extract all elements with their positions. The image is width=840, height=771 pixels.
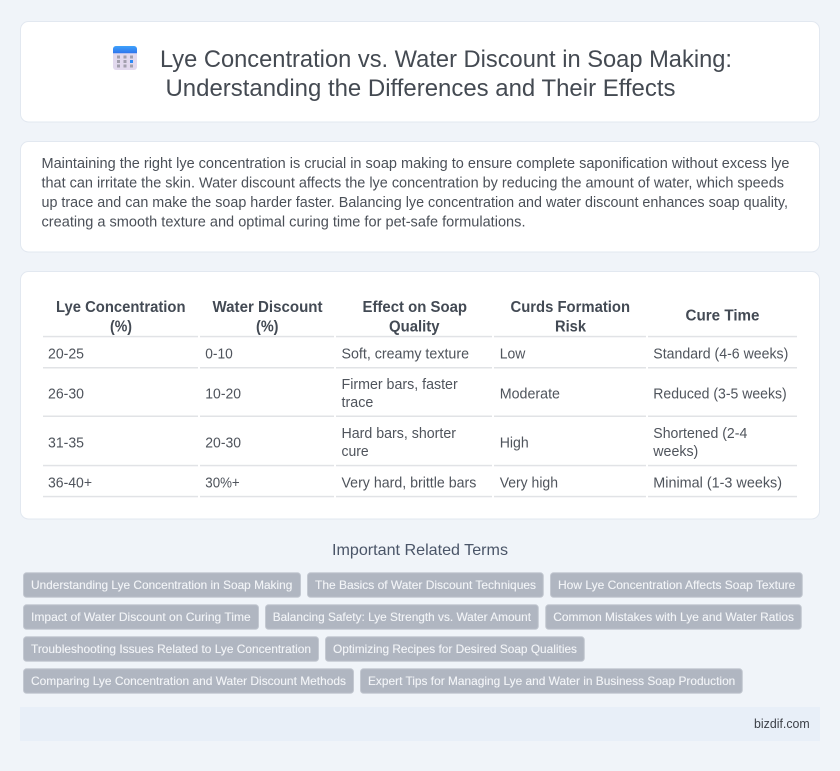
table row 4 xyxy=(48,475,782,491)
table row 3: High xyxy=(500,435,529,451)
table header row: Curds Formation xyxy=(510,299,630,316)
tag: understanding lye concentration: Understanding Lye Concentration in Soap Making xyxy=(31,578,292,592)
table header row: Cure Time xyxy=(686,308,760,325)
heading: related terms: Important Related Terms xyxy=(332,542,508,559)
table row 2: Firmer bars, faster xyxy=(342,377,458,393)
table header row: Effect on Soap xyxy=(362,299,467,316)
icon: calendar xyxy=(113,46,137,70)
title: Understanding the Differences and Their Effects xyxy=(166,75,676,102)
text block: introduction paragraph: that can irritate the skin. Water discount affects the lye concentration by reducing the amount of water, which speeds xyxy=(42,176,784,192)
table row 2 xyxy=(48,377,787,411)
table header row: Water Discount xyxy=(212,299,323,316)
table header row: Quality xyxy=(389,318,440,336)
table row 2: Reduced (3-5 weeks) xyxy=(653,386,787,402)
tag: balancing safety xyxy=(266,605,538,629)
panel: introduction xyxy=(20,142,820,252)
panel: header xyxy=(20,22,820,122)
table row 3: weeks) xyxy=(652,444,698,460)
tag: soap texture xyxy=(550,573,802,597)
tag: common mistakes: Common Mistakes with Lye and Water Ratios xyxy=(553,610,794,624)
tag: water discount basics: The Basics of Water Discount Techniques xyxy=(315,578,536,592)
table header row: (%) xyxy=(256,318,278,336)
table row 3: Hard bars, shorter xyxy=(342,426,456,442)
table header row: Lye Concentration xyxy=(56,299,186,316)
tag: troubleshooting: Troubleshooting Issues Related to Lye Concentration xyxy=(31,642,311,656)
table row 1 xyxy=(48,346,788,362)
table row 3: 31-35 xyxy=(48,435,84,451)
table header row xyxy=(56,299,760,336)
tag: curing time xyxy=(24,605,258,629)
table row 3: 20-30 xyxy=(205,435,241,451)
table row 1: Standard (4-6 weeks) xyxy=(653,346,788,362)
footer xyxy=(20,707,820,741)
table row 2: 10-20 xyxy=(205,386,241,402)
tag: soap texture: How Lye Concentration Affects Soap Texture xyxy=(558,578,796,592)
text block: introduction paragraph: Maintaining the right lye concentration is crucial in soap making to ensure complete saponification without excess lye xyxy=(42,156,789,172)
title xyxy=(160,46,732,102)
tag: balancing safety: Balancing Safety: Lye Strength vs. Water Amount xyxy=(273,610,532,624)
table row 3: cure xyxy=(342,444,369,460)
table header row: (%) xyxy=(110,318,132,336)
title: Lye Concentration vs. Water Discount in Soap Making: xyxy=(160,46,732,73)
tag: expert tips: Expert Tips for Managing Lye and Water in Business Soap Production xyxy=(368,674,735,688)
table row 1: 20-25 xyxy=(48,346,84,362)
text block: introduction paragraph: up trace and can make the soap harder faster. Balancing lye concentration and water discount enhances soap quality, xyxy=(42,195,788,211)
tag: common mistakes xyxy=(546,605,801,629)
table row 1: 0-10 xyxy=(205,346,233,362)
table row 4: Minimal (1-3 weeks) xyxy=(653,475,782,491)
tag: curing time: Impact of Water Discount on Curing Time xyxy=(31,610,251,624)
table row 4: 30%+ xyxy=(205,475,240,491)
tag: understanding lye concentration xyxy=(24,573,300,597)
tag: troubleshooting xyxy=(24,637,318,661)
table row 1: Soft, creamy texture xyxy=(342,346,469,362)
table row 2: 26-30 xyxy=(48,386,84,402)
tag: optimizing recipes xyxy=(326,637,584,661)
table header row: Risk xyxy=(555,318,586,336)
tag: optimizing recipes: Optimizing Recipes for Desired Soap Qualities xyxy=(333,642,577,656)
tag: comparing methods xyxy=(24,669,354,693)
table row 2: trace xyxy=(342,395,373,411)
table row 1: Low xyxy=(500,346,526,362)
table row 4: Very hard, brittle bars xyxy=(342,475,476,491)
tag: comparing methods: Comparing Lye Concentration and Water Discount Methods xyxy=(31,674,346,688)
tag: water discount basics xyxy=(308,573,543,597)
panel: comparison table xyxy=(20,272,820,519)
table row 3 xyxy=(48,426,747,460)
panel: related term tags xyxy=(24,573,802,693)
footer: bizdif.com xyxy=(754,716,810,731)
table row 2: Moderate xyxy=(500,386,560,402)
text block: introduction paragraph xyxy=(42,156,789,230)
table row 3: Shortened (2-4 xyxy=(653,426,747,442)
tag: expert tips xyxy=(360,669,742,693)
text block: introduction paragraph: creating a smooth texture and optimal curing time for pet-safe formulations. xyxy=(42,214,526,230)
table row 4: Very high xyxy=(500,475,558,491)
table row 4: 36-40+ xyxy=(48,475,92,491)
